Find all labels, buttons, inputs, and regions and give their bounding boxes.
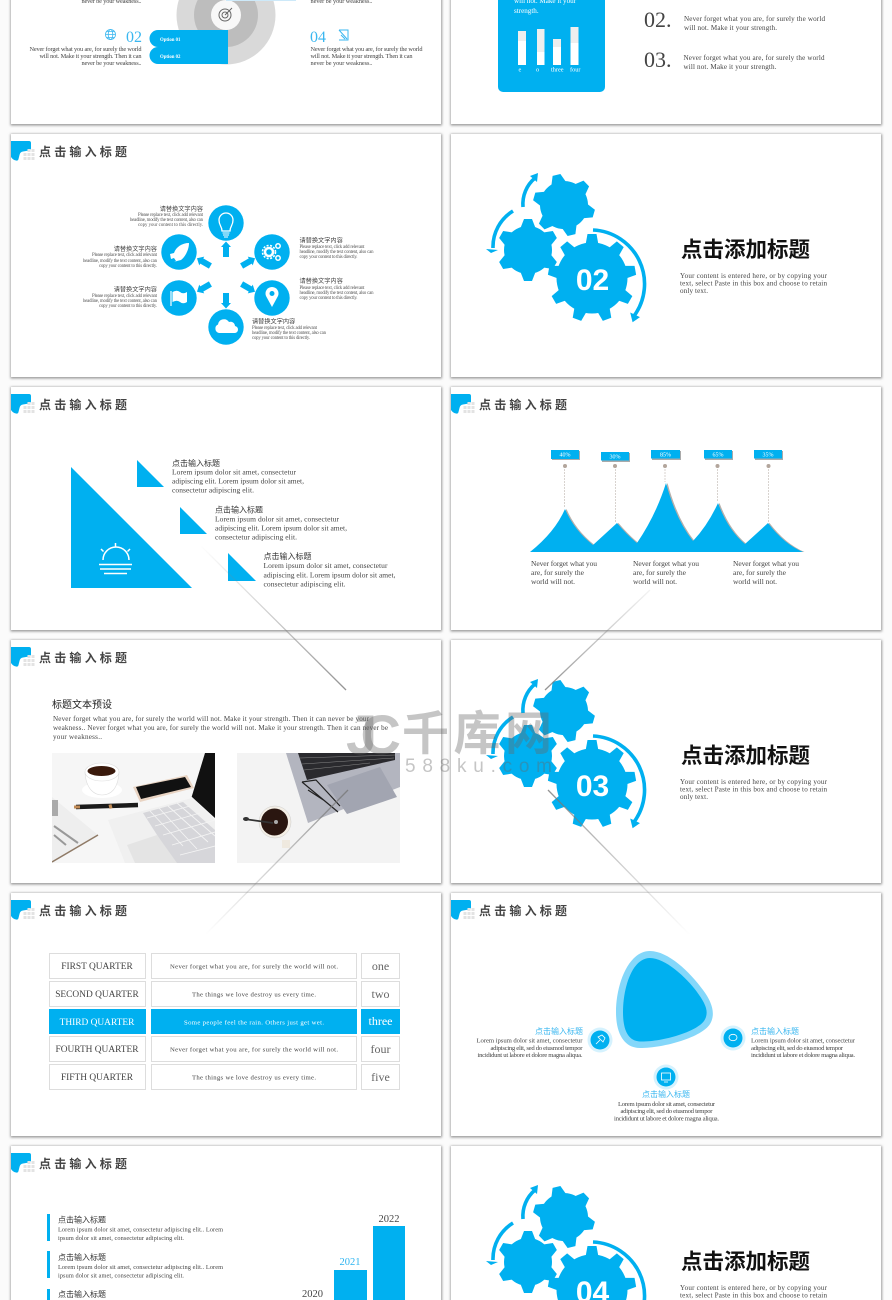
list item 02: will not. Make it your strength. <box>684 24 777 32</box>
triangle item 3: adipiscing elit. Lorem ipsum dolor sit amet, <box>264 570 396 580</box>
blue card <box>498 0 605 92</box>
label: flag: headline, modify the text content, also can <box>83 299 158 304</box>
list item 1: 点击输入标题 <box>58 1214 106 1224</box>
chart caption 1 <box>531 559 597 586</box>
chart caption 2 <box>633 559 699 586</box>
text: bottom: Lorem ipsum dolor sit amet, consectetur <box>618 1101 716 1108</box>
triangle item 2 <box>180 504 347 542</box>
central rounded triangle <box>616 951 713 1048</box>
triangle item 1: 点击输入标题 <box>172 458 220 468</box>
heading: 点击输入标题 <box>39 144 130 159</box>
label: flag: Please replace text, click add relevant <box>92 294 158 299</box>
icon: light bulb <box>208 205 244 241</box>
icon: sunrise <box>99 543 132 574</box>
panel: list and growth bars <box>10 1146 442 1300</box>
large triangle <box>71 467 192 588</box>
triangle item 2: consectetur adipiscing elit. <box>215 532 297 542</box>
icon: map pin <box>254 280 290 316</box>
watermark logo text <box>346 703 552 777</box>
table row 4: four <box>370 1042 390 1056</box>
item 04: Never forget what you are, for surely the world <box>310 46 423 53</box>
description <box>680 272 828 295</box>
text: right: incididunt ut labore et dolore magna aliqua. <box>751 1052 855 1059</box>
logo mark <box>11 900 34 920</box>
label: gears: headline, modify the text content, also can <box>300 250 374 255</box>
radial arrows <box>194 242 258 308</box>
section number: 02 <box>576 264 609 297</box>
panel: six-icon radial diagram <box>10 134 442 378</box>
label: gears <box>300 236 374 260</box>
icon: speech node <box>720 1026 746 1050</box>
label: flag <box>83 286 158 309</box>
text: bottom: adipiscing elit, sed do eiusmod tempor <box>620 1108 713 1115</box>
logo mark <box>451 900 474 920</box>
option tabs: Option 02 <box>160 55 181 60</box>
panel: quarter table <box>10 893 442 1138</box>
triangle item 3: Lorem ipsum dolor sit amet, consectetur <box>264 561 388 570</box>
watermark logo text: JC <box>346 703 401 766</box>
label: pin: 请替换文字内容 <box>300 277 343 285</box>
growth bar chart: 2021 <box>340 1257 360 1268</box>
percentage tags: 85% <box>660 452 671 458</box>
text: bottom: incididunt ut labore et dolore magna aliqua. <box>614 1116 719 1122</box>
item 02: never be your weakness.. <box>82 60 142 67</box>
panel: top-right blue card and numbered list <box>450 0 882 126</box>
logo mark <box>11 1153 34 1173</box>
text: left: adipiscing elit, sed do eiusmod tempor <box>490 1045 583 1052</box>
chart caption 2: Never forget what you <box>633 559 699 568</box>
item 04 <box>310 29 423 67</box>
label: bulb: headline, modify the text content, also can <box>130 218 204 223</box>
list item 03: 03. <box>644 47 672 72</box>
table row 3 highlighted: THIRD QUARTER <box>60 1018 135 1028</box>
description: only text. <box>680 793 708 801</box>
item 02: will not. Make it your strength. Then it can <box>40 53 142 60</box>
card bar chart: three <box>551 66 564 74</box>
icon: pin node <box>588 1028 612 1052</box>
growth bar chart <box>302 1214 405 1300</box>
card bar chart: four <box>570 66 581 74</box>
label: cloud: Please replace text, click add relevant <box>252 326 318 331</box>
table row 2 <box>50 982 400 1006</box>
icon: target <box>219 8 232 21</box>
percentage tags <box>551 450 783 462</box>
text: bottom <box>614 1089 719 1122</box>
subheading: 标题文本预设 <box>52 698 112 711</box>
table row 3 highlighted <box>49 1009 400 1034</box>
triangle item 3: 点击输入标题 <box>264 551 312 561</box>
option tabs: Option 01 <box>160 38 181 43</box>
percentage tags: 65% <box>712 452 724 458</box>
heading: 点击输入标题 <box>479 397 570 412</box>
table row 5: The things we love destroy us every time. <box>192 1074 316 1082</box>
list item 2: Lorem ipsum dolor sit amet, consectetur adipiscing elit.. Lorem <box>58 1264 223 1271</box>
logo mark <box>11 394 34 414</box>
card bar chart: e <box>518 66 522 74</box>
label: rocket: Please replace text, click add relevant <box>92 253 158 258</box>
chart caption 3: world will not. <box>733 577 777 586</box>
description: Your content is entered here, or by copying your <box>680 1284 828 1292</box>
table row 5: FIFTH QUARTER <box>61 1073 134 1083</box>
percentage tags: 30% <box>610 454 620 460</box>
description: Your content is entered here, or by copying your <box>680 778 828 786</box>
icon: cloud <box>208 309 244 345</box>
triangle item 2: Lorem ipsum dolor sit amet, consectetur <box>215 514 340 524</box>
label: pin: copy your content to this directly. <box>300 296 358 301</box>
icon: flag <box>161 280 197 316</box>
panel: blob diagram <box>450 893 882 1138</box>
list item 03: Never forget what you are, for surely the world <box>684 54 825 62</box>
percentage tags: 40% <box>560 452 570 458</box>
list item 03 <box>644 47 825 72</box>
text: left: Lorem ipsum dolor sit amet, consectetur <box>476 1038 583 1044</box>
list item 02: Never forget what you are, for surely the world <box>684 15 825 23</box>
watermark logo text: 588ku.com <box>405 756 552 777</box>
label: cloud: copy your content to this directly. <box>252 336 310 341</box>
label: flag: 请替换文字内容 <box>114 286 157 294</box>
chart caption 1: world will not. <box>531 577 575 586</box>
label: rocket <box>83 245 158 269</box>
label: pin: headline, modify the text content, also can <box>300 291 374 296</box>
triangle item 1: Lorem ipsum dolor sit amet, consectetur <box>172 468 296 476</box>
list item 1: ipsum dolor sit amet, consectetur adipiscing elit. <box>58 1235 184 1242</box>
panel: section 03 cover <box>450 640 882 884</box>
panel: section 02 cover <box>450 134 882 378</box>
list item 3 <box>47 1289 106 1300</box>
text: right <box>751 1026 856 1059</box>
item 04: never be your weakness.. <box>310 60 373 67</box>
list item 02 <box>644 7 825 32</box>
table row 5: five <box>371 1070 390 1084</box>
list item 02: 02. <box>644 7 672 32</box>
table row 4: Never forget what you are, for surely the world will not. <box>170 1046 338 1054</box>
paragraph: weakness.. Never forget what you are, for surely the world will not. Make it your strength. Then it can never be <box>53 724 388 732</box>
description: text, select Paste in this box and choose to retain <box>680 1292 827 1300</box>
watermark streak lines <box>200 545 690 935</box>
list item 03: will not. Make it your strength. <box>684 63 777 71</box>
title: 点击添加标题 <box>681 744 810 768</box>
label: bulb: Please replace text, click add relevant <box>138 213 204 218</box>
label: cloud <box>252 318 327 341</box>
label: bulb <box>130 205 204 228</box>
heading: 点击输入标题 <box>39 650 130 665</box>
list item 2 <box>47 1251 223 1280</box>
chart caption 2: are, for surely the <box>633 568 687 577</box>
icon: gears with arrows <box>486 1180 645 1300</box>
icon: gears with arrows <box>486 674 645 828</box>
label: cloud: 请替换文字内容 <box>252 318 295 326</box>
watermark logo text: 千库网 <box>402 707 552 760</box>
heading: 点击输入标题 <box>39 1156 130 1171</box>
description: text, select Paste in this box and choose to retain <box>680 280 827 288</box>
table row 2: The things we love destroy us every time. <box>192 992 316 998</box>
label: bulb: 请替换文字内容 <box>160 205 203 213</box>
logo mark <box>451 394 474 414</box>
panel: triangles <box>10 387 442 632</box>
panel: mountain chart <box>450 387 882 632</box>
chart caption 3 <box>733 559 799 586</box>
triangle item 1: adipiscing elit. Lorem ipsum dolor sit amet, <box>172 476 304 486</box>
triangle item 3 <box>228 551 396 588</box>
label: rocket: 请替换文字内容 <box>114 245 157 253</box>
photo: desk with laptop, coffee and phone <box>52 753 215 863</box>
heading: 点击输入标题 <box>39 903 130 918</box>
dashed leader lines and dots <box>563 464 770 522</box>
panel: photos with text <box>10 640 442 884</box>
label: pin <box>300 277 374 301</box>
heading: 点击输入标题 <box>39 397 130 412</box>
icon: gears <box>254 234 290 270</box>
table row 3 highlighted: Some people feel the rain. Others just get wet. <box>184 1020 324 1026</box>
icon: gears with arrows <box>486 168 645 322</box>
table row 1: FIRST QUARTER <box>61 962 133 972</box>
option tabs <box>150 30 228 64</box>
triangle item 1 <box>137 458 304 494</box>
list item 2: ipsum dolor sit amet, consectetur adipiscing elit. <box>58 1272 184 1280</box>
card text: strength. <box>514 7 539 15</box>
chart caption 2: world will not. <box>633 577 677 586</box>
paragraph <box>53 715 388 741</box>
chart caption 3: Never forget what you <box>733 559 799 568</box>
label: gears: copy your content to this directly. <box>300 255 358 260</box>
label: rocket: copy your content to this directly. <box>99 264 157 269</box>
label: pin: Please replace text, click add relevant <box>300 286 365 291</box>
item 04: 04 <box>310 29 326 46</box>
item 02: 02 <box>126 29 142 46</box>
list item 1: Lorem ipsum dolor sit amet, consectetur adipiscing elit.. Lorem <box>58 1226 223 1234</box>
table row 4 <box>50 1036 400 1062</box>
concentric target circles <box>176 0 296 64</box>
panel: section 04 cover <box>450 1146 882 1300</box>
label: gears: 请替换文字内容 <box>300 236 343 244</box>
card bar chart <box>518 27 581 74</box>
item 02: Never forget what you are, for surely the world <box>30 46 142 53</box>
description: Your content is entered here, or by copying your <box>680 272 828 280</box>
table row 2: SECOND QUARTER <box>55 990 140 1000</box>
growth bar chart: 2022 <box>378 1214 400 1225</box>
label: rocket: headline, modify the text content, also can <box>83 259 158 264</box>
card bar chart: o <box>536 66 539 74</box>
text: left: incididunt ut labore et dolore magna aliqua. <box>478 1052 583 1059</box>
triangle item 2: adipiscing elit. Lorem ipsum dolor sit amet, <box>215 524 347 532</box>
panel: top-left target diagram <box>10 0 442 126</box>
text: right: Lorem ipsum dolor sit amet, consectetur <box>751 1038 856 1044</box>
table row 1: Never forget what you are, for surely the world will not. <box>170 964 338 970</box>
table row 1: one <box>372 959 389 973</box>
list item 2: 点击输入标题 <box>58 1252 106 1262</box>
table row 1 <box>50 954 400 978</box>
description <box>680 1284 828 1300</box>
table row 4: FOURTH QUARTER <box>56 1045 139 1055</box>
chart caption 1: are, for surely the <box>531 568 585 577</box>
label: flag: copy your content to this directly. <box>99 304 157 309</box>
paragraph: Never forget what you are, for surely the world will not. Make it your strength. Then it can never be your <box>53 715 370 723</box>
heading: 点击输入标题 <box>479 903 570 918</box>
table row 2: two <box>372 987 390 1001</box>
item 02 <box>30 29 142 67</box>
text: left: 点击输入标题 <box>535 1026 583 1036</box>
triangle item 3: consectetur adipiscing elit. <box>264 580 346 588</box>
description: only text. <box>680 287 708 295</box>
text: left <box>476 1026 583 1059</box>
card text <box>514 0 577 15</box>
title: 点击添加标题 <box>681 1250 810 1274</box>
description: text, select Paste in this box and choose to retain <box>680 786 827 794</box>
list item 3: 点击输入标题 <box>58 1289 106 1299</box>
label: cloud: headline, modify the text content, also can <box>252 331 327 336</box>
item 04: will not. Make it your strength. Then it can <box>310 53 413 60</box>
logo mark <box>11 141 34 161</box>
triangle item 1: consectetur adipiscing elit. <box>172 486 254 494</box>
paragraph: your weakness.. <box>53 733 102 741</box>
chart caption 1: Never forget what you <box>531 559 597 568</box>
percentage tags: 35% <box>762 452 774 458</box>
list item 1 <box>47 1214 223 1242</box>
title: 点击添加标题 <box>681 238 810 262</box>
text: right: adipiscing elit, sed do eiusmod tempor <box>751 1045 844 1052</box>
section number: 03 <box>576 770 609 803</box>
icon: monitor node <box>654 1064 678 1090</box>
label: bulb: copy your content to this directly. <box>138 223 203 228</box>
text: right: 点击输入标题 <box>751 1026 799 1036</box>
triangle item 2: 点击输入标题 <box>215 504 263 514</box>
photo: laptop, glasses and coffee <box>237 753 400 863</box>
mountain peaks <box>530 483 803 552</box>
label: gears: Please replace text, click add relevant <box>300 245 365 250</box>
icon: rocket <box>161 234 197 270</box>
table row 3 highlighted: three <box>369 1014 392 1028</box>
mountain peaks shadow <box>532 483 804 552</box>
text: bottom: 点击输入标题 <box>642 1089 690 1099</box>
logo mark <box>11 647 34 667</box>
growth bar chart: 2020 <box>302 1289 323 1300</box>
chart caption 3: are, for surely the <box>733 568 787 577</box>
description <box>680 778 828 801</box>
table row 5 <box>50 1064 400 1090</box>
